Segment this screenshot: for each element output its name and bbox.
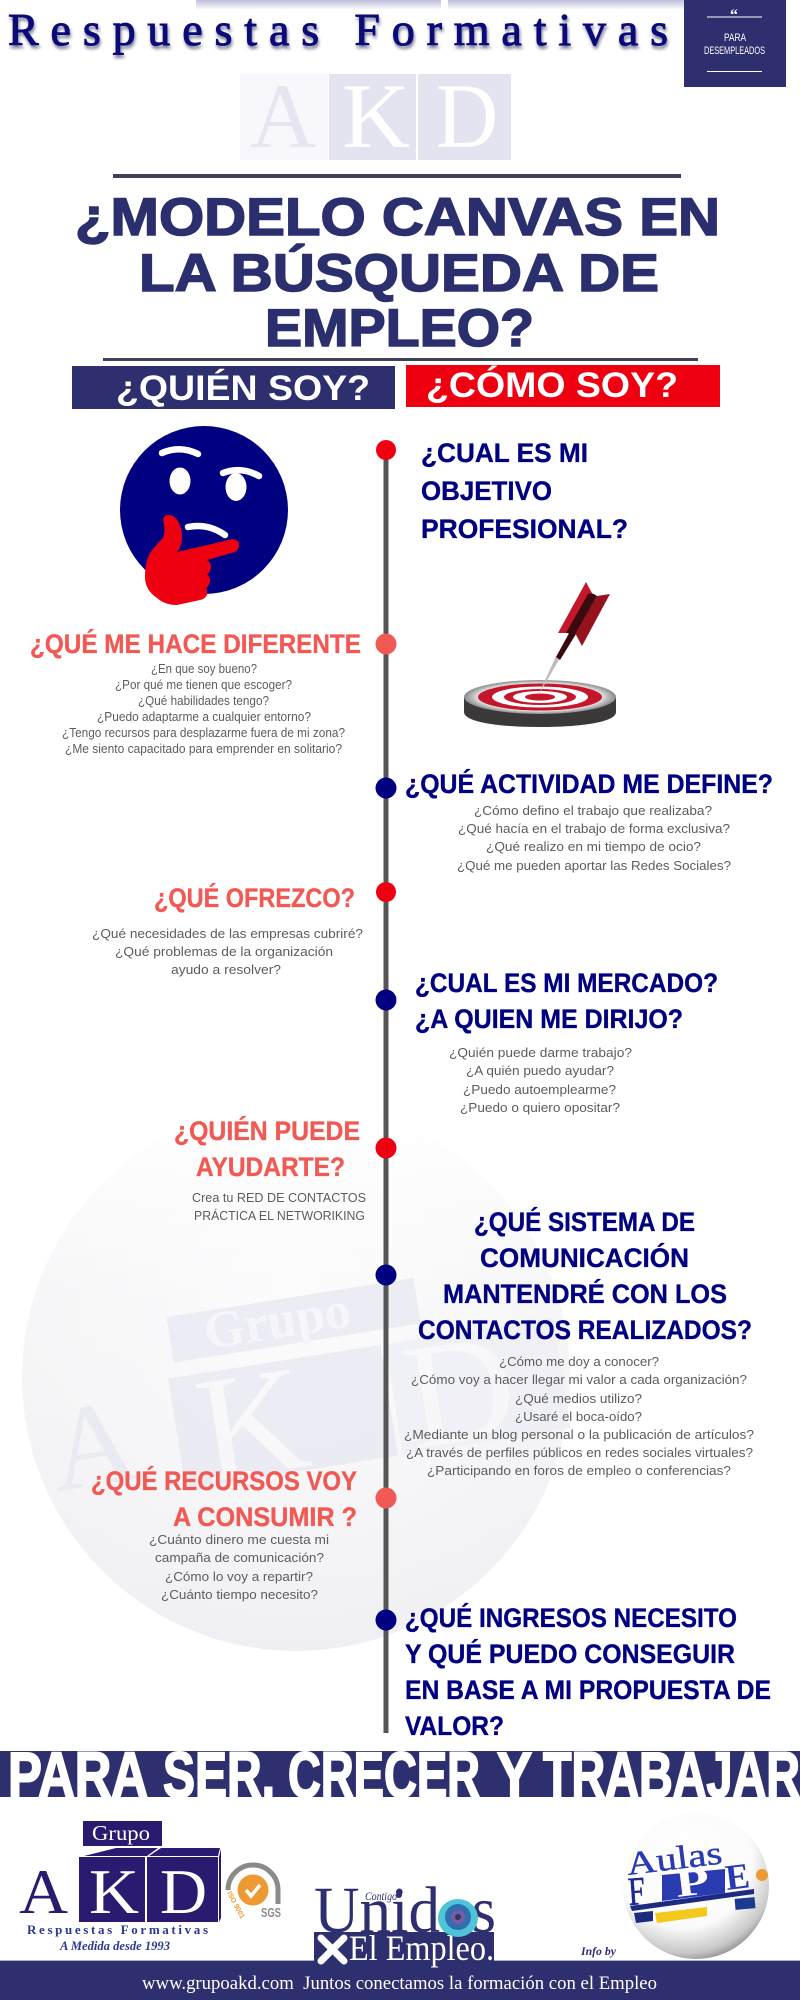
heading bar: cómo soy <box>406 365 720 407</box>
section: sistema de comunicación: ¿Usaré el boca-oído? <box>515 1409 642 1424</box>
logo: Grupo AKD: A <box>19 1856 68 1927</box>
logo: Aulas FPE sphere: E <box>723 1855 752 1898</box>
section: mercado: ¿CUAL ES MI MERCADO? <box>415 968 718 998</box>
watermark circle with faded logo: D <box>393 1301 526 1482</box>
slogan banner: Y <box>497 1739 532 1811</box>
section: mercado: ¿A QUIEN ME DIRIJO? <box>415 1004 683 1034</box>
section: sistema de comunicación: ¿Cómo voy a hacer llegar mi valor a cada organización? <box>411 1372 747 1387</box>
section: qué me hace diferente: ¿QUÉ ME HACE DIFERENTE <box>30 628 361 659</box>
info by label: Info by <box>580 1944 617 1958</box>
heading bar: quién soy: ¿QUIÉN SOY? <box>116 368 370 408</box>
section: mercado: ¿A quién puedo ayudar? <box>466 1063 614 1078</box>
footer band: www.grupoakd.com Juntos conectamos la formación con el Empleo <box>142 1973 657 1994</box>
badge: para desempleados: DESEMPLEADOS <box>704 45 765 57</box>
section: sistema de comunicación <box>404 1206 754 1478</box>
section: quién puede ayudarte: AYUDARTE? <box>196 1152 345 1182</box>
logo: Aulas FPE sphere: Aulas <box>625 1836 724 1883</box>
section: qué recursos voy a consumir: ¿QUÉ RECURSOS VOY <box>91 1465 357 1496</box>
logo: Grupo AKD: A Medida desde 1993 <box>59 1938 170 1953</box>
section: sistema de comunicación: ¿Participando en foros de empleo o conferencias? <box>427 1463 731 1478</box>
watermark circle with faded logo: Grupo <box>200 1282 354 1361</box>
section: quién puede ayudarte: ¿QUIÉN PUEDE <box>174 1115 360 1146</box>
logo: Aulas FPE sphere: F <box>626 1868 647 1914</box>
section: qué ingresos necesito: ¿QUÉ INGRESOS NECESITO <box>405 1602 737 1633</box>
header title: Respuestas Formativas: Respuestas Formativas <box>8 4 668 55</box>
section: qué me hace diferente <box>30 628 361 756</box>
section: qué ofrezco <box>92 882 363 977</box>
section: qué recursos voy a consumir: A CONSUMIR ? <box>173 1502 357 1532</box>
section: qué me hace diferente: ¿Me siento capacitado para emprender en solitario? <box>65 741 342 756</box>
section: quién puede ayudarte: PRÁCTICA EL NETWORIKING <box>194 1208 365 1223</box>
header strip <box>196 0 684 10</box>
faded AKD logo: D <box>436 65 498 167</box>
faded AKD logo: K <box>342 65 410 167</box>
icon: SGS ISO 9001 seal: ISO 9001 <box>225 1891 245 1920</box>
section: mercado: ¿Quién puede darme trabajo? <box>449 1045 632 1060</box>
section: qué me hace diferente: ¿Qué habilidades tengo? <box>138 693 269 708</box>
section: qué actividad me define: ¿Cómo defino el trabajo que realizaba? <box>474 803 712 818</box>
watermark circle with faded logo: K <box>186 1334 319 1514</box>
section: qué ofrezco: ¿QUÉ OFREZCO? <box>154 882 355 913</box>
section: qué ingresos necesito <box>405 1602 771 1741</box>
faded AKD logo: A <box>250 65 316 167</box>
section: sistema de comunicación: ¿Cómo me doy a conocer? <box>499 1354 659 1369</box>
logo: Grupo AKD: Grupo <box>92 1821 150 1845</box>
timeline line <box>384 450 388 1733</box>
section: qué me hace diferente: ¿Tengo recursos para desplazarme fuera de mi zona? <box>62 725 345 740</box>
logo: Grupo AKD: K <box>89 1856 139 1927</box>
logo: Aulas FPE sphere <box>624 1839 769 1959</box>
watermark circle with faded logo: A <box>40 1372 146 1517</box>
section: qué me hace diferente: ¿En que soy bueno? <box>151 661 257 676</box>
section: qué actividad me define: ¿Qué me pueden aportar las Redes Sociales? <box>457 858 731 873</box>
section: qué ofrezco: ¿Qué necesidades de las empresas cubriré? <box>92 926 363 941</box>
section: sistema de comunicación: ¿Qué medios utilizo? <box>515 1391 642 1406</box>
header title: Respuestas Formativas: Respuestas Formativas <box>9 7 669 58</box>
section: qué ingresos necesito: EN BASE A MI PROPUESTA DE <box>405 1675 771 1705</box>
section: qué me hace diferente: ¿Puedo adaptarme a cualquier entorno? <box>97 709 311 724</box>
section: qué me hace diferente: ¿Por qué me tienen que escoger? <box>115 677 292 692</box>
section: sistema de comunicación: ¿QUÉ SISTEMA DE <box>474 1206 695 1237</box>
section: objetivo profesional: OBJETIVO <box>421 476 552 506</box>
badge: para desempleados: “ <box>730 7 738 24</box>
main title: LA BÚSQUEDA DE <box>139 243 659 303</box>
section: qué recursos voy a consumir: ¿Cómo lo voy a repartir? <box>165 1569 313 1584</box>
section: qué ofrezco: ¿Qué problemas de la organización <box>115 944 333 959</box>
section: qué recursos voy a consumir <box>91 1465 357 1602</box>
section: sistema de comunicación: COMUNICACIÓN <box>480 1242 689 1273</box>
main title: EMPLEO? <box>265 299 534 358</box>
section: qué ingresos necesito: Y QUÉ PUEDO CONSEGUIR <box>405 1638 735 1669</box>
slogan banner: SER, <box>163 1739 275 1811</box>
slogan banner <box>0 1739 800 1811</box>
section: mercado: ¿Puedo o quiero opositar? <box>460 1100 620 1115</box>
section: sistema de comunicación: ¿Mediante un blog personal o la publicación de artículos? <box>404 1427 754 1442</box>
section: quién puede ayudarte <box>174 1115 366 1223</box>
logo: Unidos por el empleo: El Empleo. <box>349 1928 494 1968</box>
logo: Grupo AKD <box>19 1821 221 1953</box>
icon: SGS ISO 9001 seal <box>225 1865 281 1920</box>
section: sistema de comunicación: ¿A través de perfiles públicos en redes sociales virtuales? <box>406 1445 753 1460</box>
section: objetivo profesional <box>421 438 628 544</box>
section: sistema de comunicación: MANTENDRÉ CON LOS <box>443 1278 727 1309</box>
section: mercado <box>415 968 718 1115</box>
logo: Grupo AKD: Respuestas Formativas <box>27 1922 208 1937</box>
main title: ¿MODELO CANVAS EN <box>75 188 720 247</box>
section: objetivo profesional: PROFESIONAL? <box>421 514 628 544</box>
section: qué recursos voy a consumir: ¿Cuánto tiempo necesito? <box>161 1587 318 1602</box>
footer band <box>0 1960 800 2000</box>
section: qué actividad me define: ¿QUÉ ACTIVIDAD ME DEFINE? <box>405 768 773 799</box>
main title <box>75 188 720 358</box>
icon: SGS ISO 9001 seal: SGS <box>261 1905 281 1920</box>
logo: Grupo AKD: D <box>160 1856 207 1927</box>
section: qué actividad me define: ¿Qué hacía en el trabajo de forma exclusiva? <box>458 821 730 836</box>
icon: dart and target <box>464 582 616 727</box>
badge: para desempleados: PARA <box>724 32 746 44</box>
section: qué recursos voy a consumir: campaña de comunicación? <box>155 1550 324 1565</box>
heading bar: quién soy <box>72 366 395 409</box>
badge: para desempleados <box>684 0 786 87</box>
slogan banner: PARA <box>8 1739 148 1811</box>
section: qué actividad me define <box>405 768 773 873</box>
timeline dots <box>376 440 396 1630</box>
logo: Aulas FPE sphere: P <box>673 1860 712 1906</box>
section: qué ingresos necesito: VALOR? <box>405 1711 504 1741</box>
section: qué ofrezco: ayudo a resolver? <box>171 962 281 977</box>
slogan banner: CRECER <box>288 1739 480 1811</box>
faded AKD logo <box>240 65 511 167</box>
section: qué actividad me define: ¿Qué realizo en mi tiempo de ocio? <box>486 839 701 854</box>
section: qué recursos voy a consumir: ¿Cuánto dinero me cuesta mi <box>149 1532 329 1547</box>
heading bar: cómo soy: ¿CÓMO SOY? <box>426 365 678 405</box>
logo: Unidos por el empleo: Unidos <box>314 1874 496 1947</box>
section: mercado: ¿Puedo autoemplearme? <box>463 1082 616 1097</box>
section: sistema de comunicación: CONTACTOS REALIZADOS? <box>418 1315 752 1345</box>
watermark circle with faded logo <box>22 1103 575 1651</box>
icon: thinking face <box>120 426 288 605</box>
section: objetivo profesional: ¿CUAL ES MI <box>421 438 588 468</box>
logo: Unidos por el empleo: Contigo <box>365 1889 397 1903</box>
section: quién puede ayudarte: Crea tu RED DE CONTACTOS <box>192 1190 366 1205</box>
